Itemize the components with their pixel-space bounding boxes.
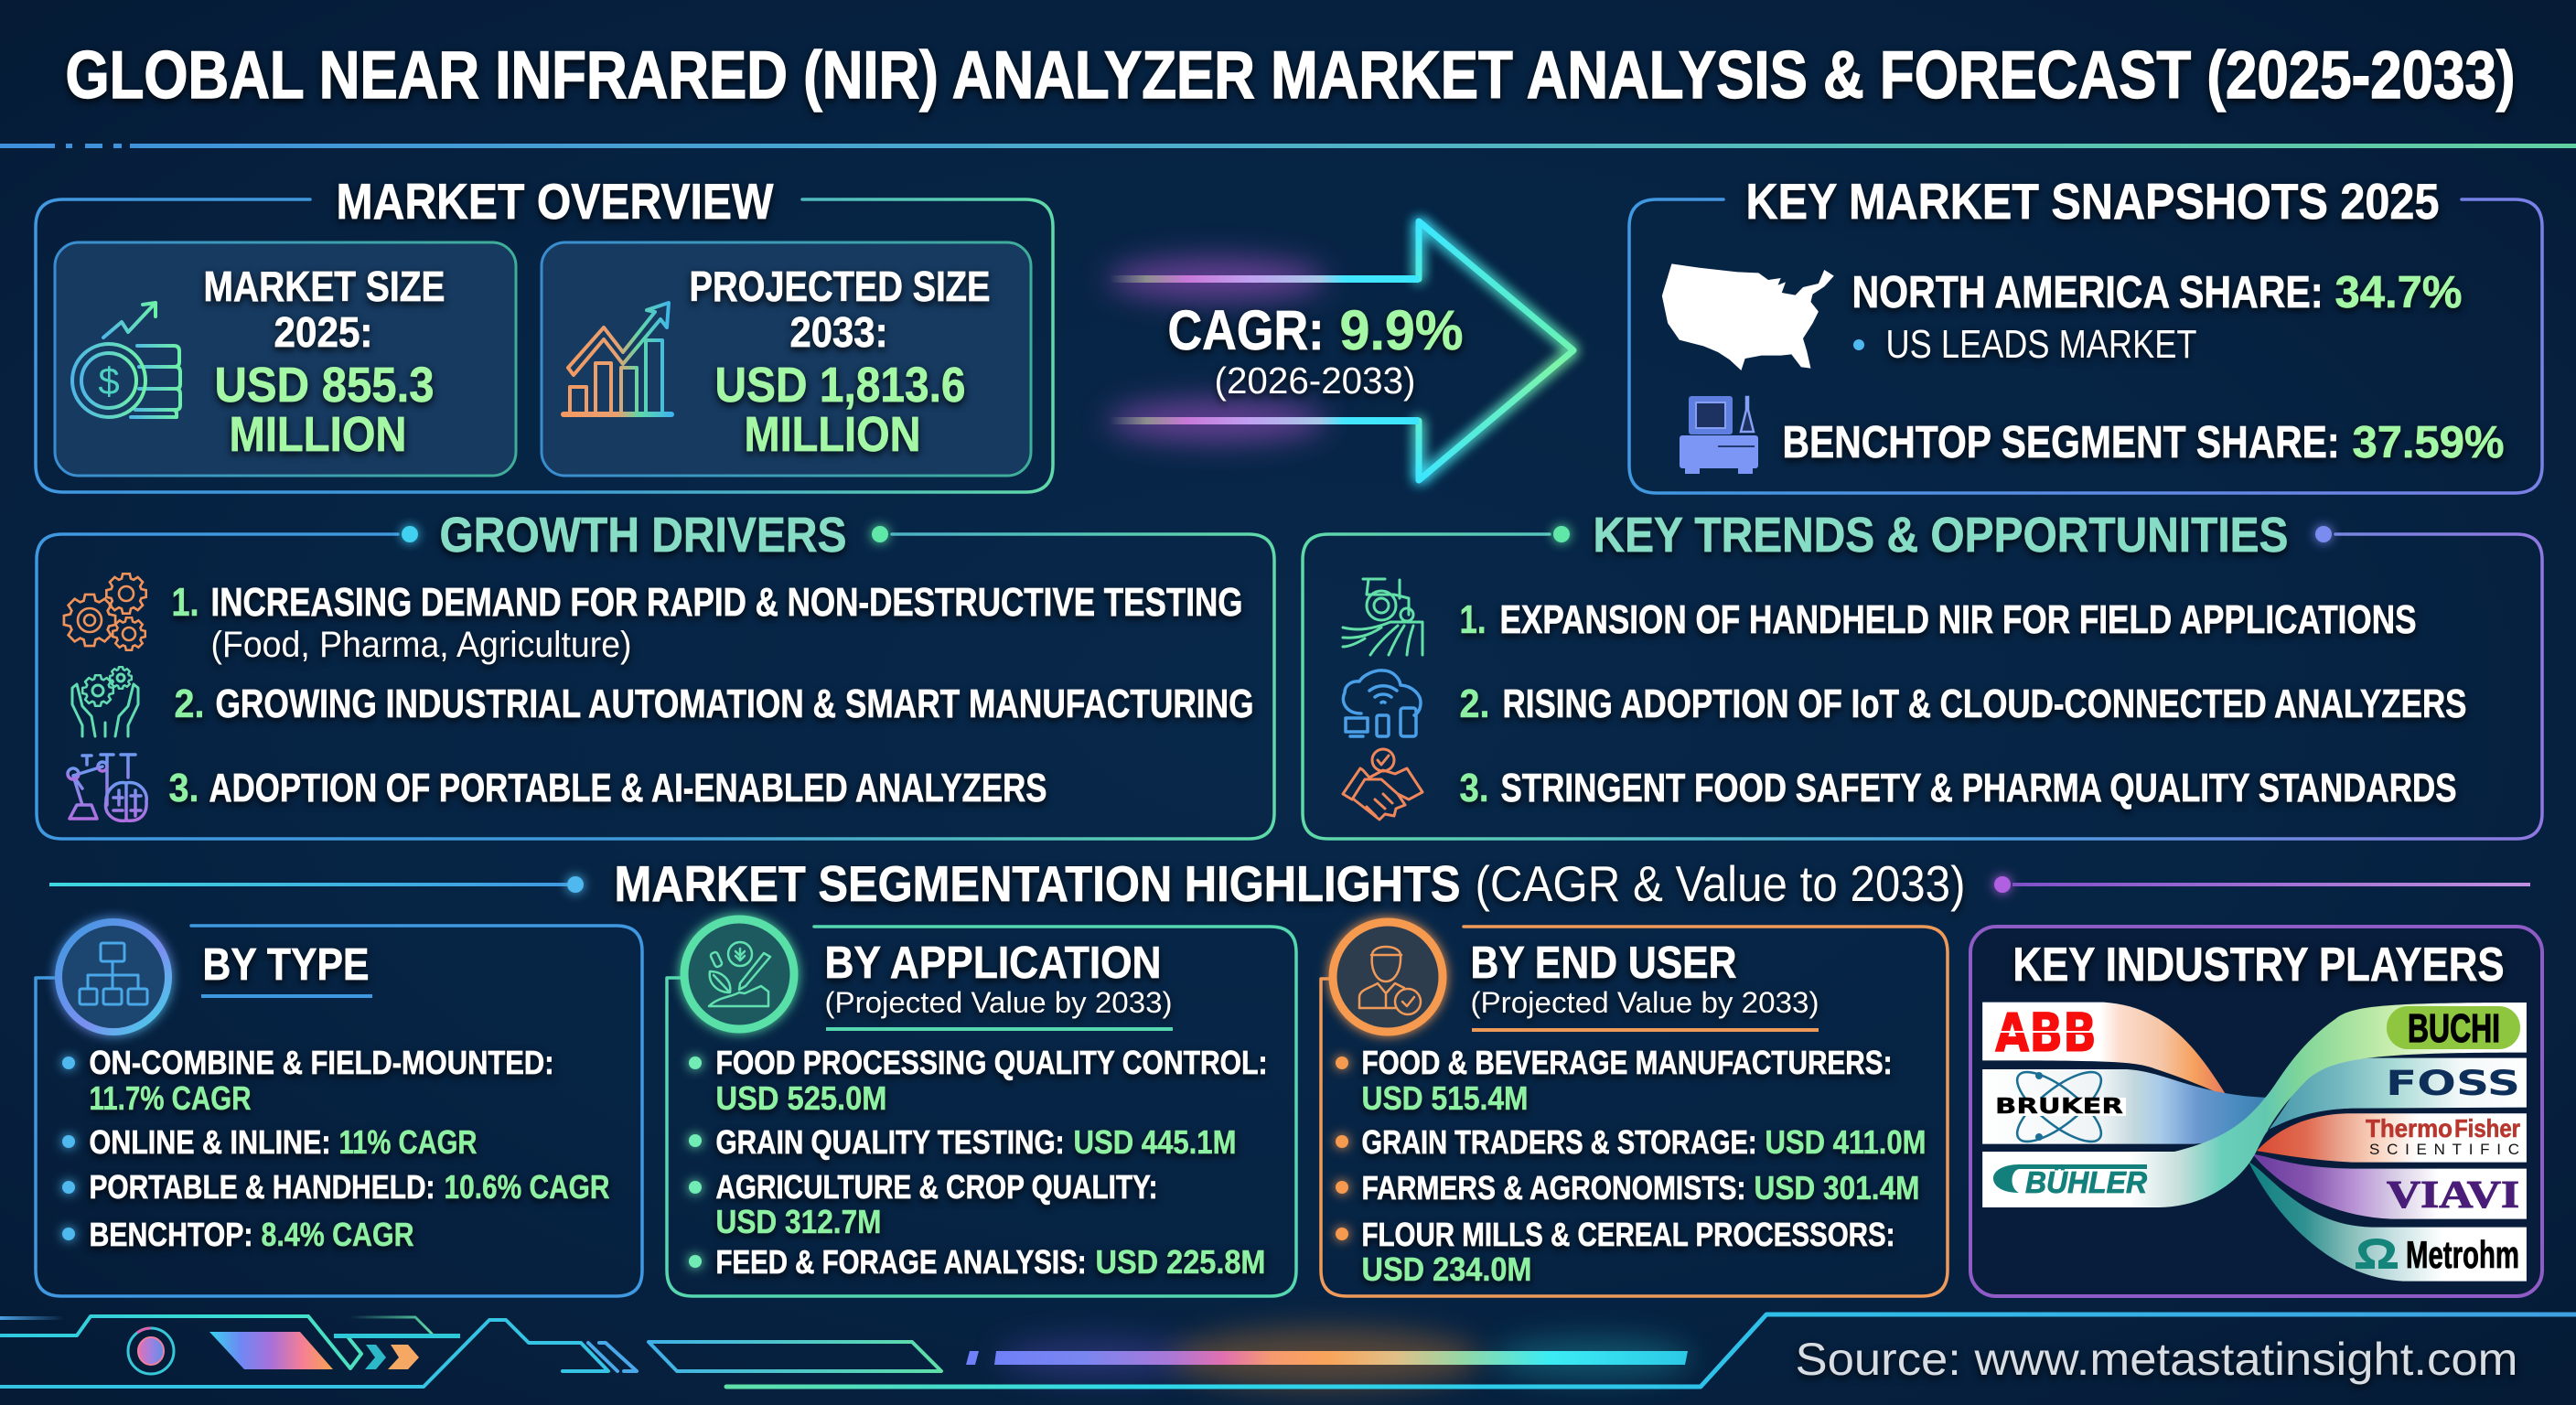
item: driver 3: ADOPTION OF PORTABLE & AI-ENABLED ANALYZERS xyxy=(209,766,1046,810)
icon: tractor in field xyxy=(1343,579,1422,655)
item: trend 3: 3. xyxy=(1460,766,1489,810)
list: end user segments: GRAIN TRADERS & STORAGE: xyxy=(1361,1123,1756,1161)
text: projected size label: PROJECTED SIZE xyxy=(690,263,990,310)
list: end user segments xyxy=(1336,1044,1927,1288)
underline xyxy=(1472,1028,1819,1032)
icon: person with check in ring xyxy=(1333,922,1443,1032)
icon: footer lens xyxy=(128,1328,174,1374)
icon: hierarchy in ring xyxy=(59,922,168,1032)
logo: Foss: FOSS xyxy=(2386,1064,2520,1103)
panel: growth drivers xyxy=(37,508,1274,839)
item: driver 1: INCREASING DEMAND FOR RAPID & NON-DESTRUCTIVE TESTING xyxy=(210,580,1242,625)
icon: chevrons xyxy=(365,1345,419,1369)
text: CAGR value xyxy=(1167,299,1464,402)
heading: market overview: MARKET OVERVIEW xyxy=(337,173,774,230)
item: trend 2: 2. xyxy=(1460,681,1489,726)
list: end user segments: USD 411.0M xyxy=(1766,1123,1927,1161)
logo: ABB: ABB xyxy=(1995,1002,2097,1064)
icon: coins with rising arrow xyxy=(72,303,180,417)
panel: key industry players xyxy=(1970,927,2542,1296)
list: application segments: USD 525.0M xyxy=(715,1079,887,1117)
text: US leads market: US LEADS MARKET xyxy=(1886,322,2197,367)
logo: Thermo Fisher: Fisher xyxy=(2454,1114,2520,1142)
item: driver 1: (Food, Pharma, Agriculture) xyxy=(210,625,631,665)
list: application segments xyxy=(689,1044,1268,1281)
heading: snapshots: KEY MARKET SNAPSHOTS 2025 xyxy=(1745,173,2439,230)
text: projected size label xyxy=(690,263,990,462)
icon: USA map xyxy=(1662,263,1834,370)
bullet xyxy=(1853,339,1864,350)
item: driver 2: 2. xyxy=(174,681,205,726)
heading: by application xyxy=(825,938,1173,1019)
icon: hands with gears xyxy=(72,667,138,736)
list: type segments xyxy=(62,1044,609,1253)
panel: by application xyxy=(667,919,1296,1296)
logo: Buchi: BUCHI xyxy=(2408,1006,2500,1051)
icon: cloud and devices xyxy=(1343,670,1421,736)
text: projected size label: USD 1,813.6 xyxy=(715,358,966,413)
footer decoration: right frame xyxy=(726,1314,2576,1387)
dot xyxy=(872,526,888,542)
list: type segments: 11.7% CAGR xyxy=(90,1079,251,1117)
logo: Thermo Fisher: SCIENTIFIC xyxy=(2369,1141,2519,1158)
dot xyxy=(1553,526,1570,542)
heading: by end user xyxy=(1471,938,1819,1019)
heading: by application: (Projected Value by 2033) xyxy=(825,986,1173,1019)
list: application segments: AGRICULTURE & CROP QUALITY: xyxy=(715,1168,1158,1206)
list: end user segments: FLOUR MILLS & CEREAL PROCESSORS: xyxy=(1361,1216,1895,1253)
icon: benchtop analyzer xyxy=(1680,396,1758,474)
list: type segments: ON-COMBINE & FIELD-MOUNTED: xyxy=(90,1044,554,1081)
text: CAGR value: (2026-2033) xyxy=(1215,359,1416,402)
logo: Bruker: BRUKER xyxy=(1995,1095,2123,1119)
title rule xyxy=(0,144,2576,148)
icon: plant and pen in ring xyxy=(684,919,794,1029)
list: type segments: ONLINE & INLINE: xyxy=(90,1123,331,1161)
text: market size label: MARKET SIZE xyxy=(203,263,445,310)
item: driver 1: 1. xyxy=(172,580,199,625)
item: driver 2: GROWING INDUSTRIAL AUTOMATION & SMART MANUFACTURING xyxy=(216,681,1253,726)
text: projected size label: MILLION xyxy=(745,407,920,462)
list: application segments: USD 445.1M xyxy=(1074,1123,1237,1161)
text: market size label: 2025: xyxy=(274,308,373,356)
icon: bars with rising arrow xyxy=(564,303,671,414)
text: benchtop share: 37.59% xyxy=(2353,418,2505,467)
list: application segments: GRAIN QUALITY TESTING: xyxy=(715,1123,1065,1161)
list: application segments: USD 312.7M xyxy=(715,1203,882,1240)
panel: by end user xyxy=(1321,922,1948,1296)
footer decoration: rainbow bar xyxy=(966,1327,1692,1389)
panel: key market snapshots xyxy=(1629,173,2542,493)
heading: by end user: (Projected Value by 2033) xyxy=(1471,986,1819,1019)
list: application segments: FEED & FORAGE ANALYSIS: xyxy=(715,1243,1087,1281)
text: market size label xyxy=(203,263,445,462)
heading: growth drivers: GROWTH DRIVERS xyxy=(439,508,847,563)
icon: gears xyxy=(64,574,146,650)
list: end user segments: FOOD & BEVERAGE MANUFACTURERS: xyxy=(1361,1044,1892,1081)
source: Source: www.metastatinsight.com xyxy=(1795,1334,2517,1385)
list: type segments: 10.6% CAGR xyxy=(445,1168,609,1206)
list: application segments: FOOD PROCESSING QUALITY CONTROL: xyxy=(715,1044,1268,1081)
logo: Bruker xyxy=(1992,1061,2126,1153)
list: end user segments: USD 301.4M xyxy=(1755,1169,1919,1207)
icon: coins with rising arrow: $ xyxy=(98,359,120,402)
list: end user segments: USD 515.4M xyxy=(1361,1079,1528,1117)
list: end user segments: FARMERS & AGRONOMISTS: xyxy=(1361,1169,1745,1207)
logo: Thermo Fisher: Thermo xyxy=(2366,1114,2453,1142)
item: trend 1: 1. xyxy=(1460,597,1486,642)
dot xyxy=(2315,526,2332,542)
item: driver 3: 3. xyxy=(168,766,199,810)
panel: by type xyxy=(36,922,642,1296)
dot xyxy=(402,526,418,542)
heading: by type: BY TYPE xyxy=(203,940,370,990)
heading: market segmentation highlights: (CAGR & Value to 2033) xyxy=(1475,855,1965,912)
text: market size label: MILLION xyxy=(229,407,406,462)
logo: Buhler: BÜHLER xyxy=(2025,1165,2147,1199)
icon: robot arm and AI brain xyxy=(68,755,146,820)
logo: Viavi: VIAVI xyxy=(2387,1174,2519,1217)
heading: by application: BY APPLICATION xyxy=(825,938,1162,988)
heading: market segmentation highlights xyxy=(49,855,2530,912)
text: CAGR value: CAGR: xyxy=(1167,299,1325,361)
card: projected size 2033 xyxy=(542,242,1031,476)
text: CAGR value: 9.9% xyxy=(1339,299,1464,361)
ribbons: company bands xyxy=(1982,1003,2527,1282)
list: type segments: BENCHTOP: xyxy=(90,1216,252,1253)
icon: handshake with check xyxy=(1343,749,1422,820)
item: driver 1 xyxy=(172,580,1242,665)
arrow: CAGR xyxy=(1107,221,1573,480)
underline xyxy=(201,994,372,998)
logo: Metrohm xyxy=(2356,1233,2519,1276)
text: north america share: 34.7% xyxy=(2334,268,2463,317)
list: type segments: 8.4% CAGR xyxy=(262,1216,413,1253)
card: market size 2025 xyxy=(55,242,516,476)
underline xyxy=(826,1027,1173,1031)
text: north america share: NORTH AMERICA SHARE: xyxy=(1852,268,2324,317)
logo: Thermo Fisher xyxy=(2366,1114,2520,1158)
panel: key trends and opportunities xyxy=(1303,508,2542,839)
text: market size label: USD 855.3 xyxy=(214,358,434,413)
heading: market segmentation highlights: MARKET SEGMENTATION HIGHLIGHTS xyxy=(615,855,1460,912)
logo: Metrohm: Metrohm xyxy=(2406,1233,2519,1276)
panel: market overview xyxy=(36,173,1053,492)
list: type segments: PORTABLE & HANDHELD: xyxy=(90,1168,435,1206)
footer decoration: left circuit xyxy=(0,1316,941,1387)
icon: gradient parallelogram xyxy=(209,1332,333,1369)
text: benchtop share: BENCHTOP SEGMENT SHARE: xyxy=(1782,418,2340,467)
text: projected size label: 2033: xyxy=(790,308,887,356)
list: application segments: USD 225.8M xyxy=(1096,1243,1266,1281)
list: type segments: 11% CAGR xyxy=(338,1123,478,1161)
list: end user segments: USD 234.0M xyxy=(1361,1250,1531,1288)
heading: by end user: BY END USER xyxy=(1471,938,1736,988)
heading: trends: KEY TRENDS & OPPORTUNITIES xyxy=(1594,508,2289,563)
